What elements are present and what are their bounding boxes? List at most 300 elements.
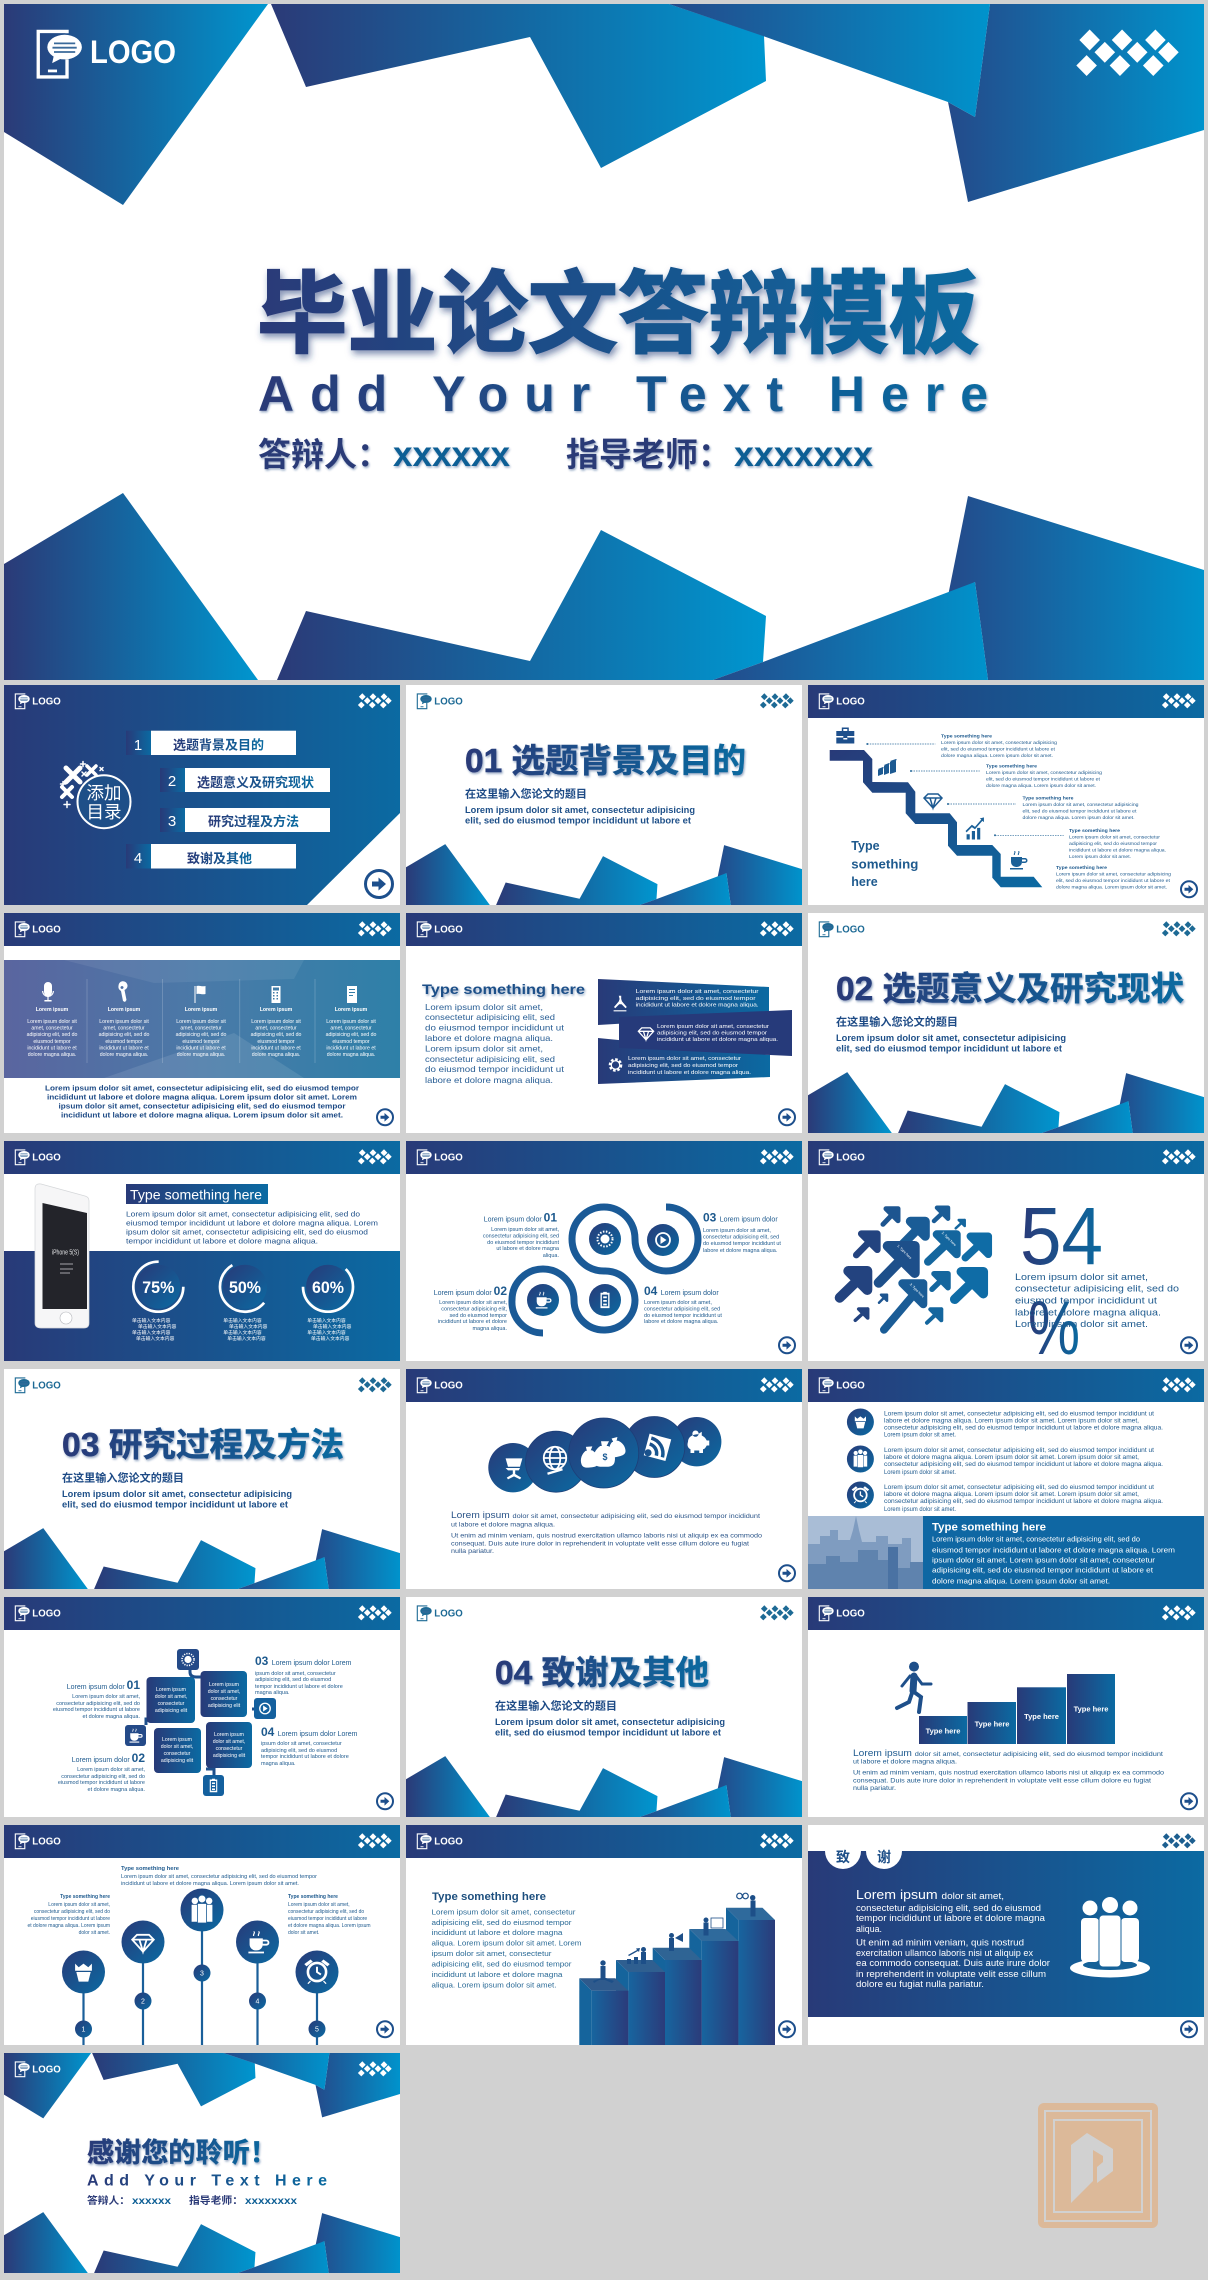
column 2 text: adipisicing elit, sed do <box>99 1032 149 1038</box>
lower colour band <box>4 1251 400 1361</box>
icon: diamonds <box>358 1377 392 1392</box>
panel: steps slide <box>808 1597 1204 1817</box>
text block 01: Lorem ipsum dolor 01 <box>484 1210 557 1224</box>
bottom geometric shapes <box>406 844 802 905</box>
text block 01: consectetur adipisicing elit, sed <box>483 1234 559 1240</box>
section title: 01 选题背景及目的 <box>465 742 746 779</box>
watermark stamp <box>1038 2103 1158 2228</box>
logo <box>417 1834 463 1849</box>
section subtitle: 在这里输入您论文的题目 <box>465 786 587 800</box>
icon: diamonds <box>760 1833 794 1848</box>
text list 1: labore et dolore magna aliqua. Lorem ipsum dolor sit amet. Lorem ipsum dolor sit amet, <box>884 1418 1139 1424</box>
closing presenter line: 指导老师： <box>189 2194 243 2207</box>
left text block: eiusmod tempor incididunt ut labore <box>31 1916 110 1922</box>
body text: aliqua. Lorem ipsum dolor sit amet. <box>432 1980 556 1989</box>
side heading <box>851 839 918 889</box>
text block 5 <box>1056 865 1171 890</box>
lollipop 4: 4 <box>256 1998 260 2006</box>
icon: diamond pattern <box>1076 30 1179 76</box>
column 3 text: Lorem ipsum <box>185 1007 218 1013</box>
text band: eiusmod tempor incididunt ut labore et dolore magna aliqua. Lorem <box>932 1546 1175 1554</box>
column 4 text <box>251 1007 301 1058</box>
tile 4: Lorem ipsum <box>214 1732 244 1738</box>
ribbon panel 1: adipisicing elit, sed do eiusmod tempor <box>636 996 756 1002</box>
node: battery <box>589 1284 621 1316</box>
logo: LOGO <box>32 2063 61 2075</box>
section body: elit, sed do eiusmod tempor incididunt ut labore et <box>465 816 691 826</box>
text block 02: consectetur adipisicing elit, <box>441 1306 507 1312</box>
logo <box>819 1606 865 1621</box>
text block 1: elit, sed do eiusmod tempor incididunt ut labore et <box>941 746 1056 752</box>
section body: elit, sed do eiusmod tempor incididunt ut labore et <box>836 1044 1062 1054</box>
icon: diamonds <box>1162 1833 1196 1848</box>
text list 3 <box>884 1485 1163 1513</box>
text block 04: consectetur adipisicing elit, sed <box>644 1306 720 1312</box>
text list 3: Lorem ipsum dolor sit amet, consectetur adipisicing elit, sed do eiusmod tempor incididunt ut <box>884 1485 1154 1491</box>
big number: 54 <box>1020 1191 1103 1282</box>
button: next <box>779 1109 795 1125</box>
text block 2: dolore magna aliqua. Lorem ipsum dolor sit amet. <box>986 783 1096 788</box>
icon: diamonds <box>760 1605 794 1620</box>
column 5 text <box>326 1007 376 1058</box>
text list 3: labore et dolore magna aliqua. Lorem ipsum dolor sit amet. Lorem ipsum dolor sit amet, <box>884 1492 1139 1498</box>
logo: LOGO <box>434 1379 463 1391</box>
body text <box>126 1209 378 1246</box>
body text: eiusmod tempor incididunt ut <box>1015 1295 1157 1305</box>
body text: dolore eu fugiat nulla pariatur. <box>856 1979 984 1989</box>
gauge caption 2: 单击输入文本内容 <box>223 1329 262 1336</box>
icon: chart <box>966 817 984 839</box>
column 3 text: Lorem ipsum dolor sit <box>176 1019 226 1025</box>
text list 1: consectetur adipisicing elit, sed do eiusmod tempor incididunt ut labore et dolore magna aliqua. <box>884 1426 1163 1432</box>
side heading: something <box>851 858 918 872</box>
column 3 text: adipisicing elit, sed do <box>176 1032 226 1038</box>
lollipop 3: 3 <box>200 1970 204 1978</box>
column 5 text: dolore magna aliqua. <box>327 1052 375 1058</box>
text list 2: consectetur adipisicing elit, sed do eiusmod tempor incididunt ut labore et dolore magna aliqua. <box>884 1462 1163 1468</box>
ribbon panel 3: Lorem ipsum dolor sit amet, consectetur <box>628 1056 741 1062</box>
lollipop stems <box>84 1910 317 2045</box>
icon: diamonds <box>760 693 794 708</box>
panel: ribbon slide <box>406 913 802 1133</box>
column 1 text: eiusmod tempor <box>33 1039 71 1045</box>
badge: 致: 致 <box>836 1849 850 1865</box>
column 1 text <box>27 1007 77 1058</box>
header bar <box>808 1369 1204 1402</box>
section body <box>62 1489 292 1510</box>
column 5 text: adipisicing elit, sed do <box>326 1032 376 1038</box>
column 3 text: eiusmod tempor <box>182 1039 220 1045</box>
body text: consequat. Duis aute irure dolor in reprehenderit in voluptate velit esse cillum dolore eu fugiat <box>853 1778 1151 1784</box>
step bar 2 <box>968 1702 1016 1744</box>
icon circle 1 <box>847 1408 874 1436</box>
contents item 3: 3 <box>168 813 176 830</box>
text block 03 <box>255 1654 352 1696</box>
column 5 text: Lorem ipsum dolor sit <box>326 1019 376 1025</box>
section body <box>836 1033 1066 1054</box>
header bar <box>808 1597 1204 1630</box>
s-curve ribbon <box>512 1207 698 1333</box>
column 1 text: Lorem ipsum <box>36 1007 69 1013</box>
footer text: ipsum dolor sit amet, consectetur adipisicing elit, sed do eiusmod tempor <box>58 1102 346 1110</box>
icon: diamonds <box>358 2061 392 2076</box>
logo <box>15 1834 61 1849</box>
logo <box>15 2062 61 2077</box>
top text block: incididunt ut labore et dolore magna aliqua. Lorem ipsum dolor sit amet. <box>121 1881 299 1887</box>
badge: add contents: 目录 <box>86 802 122 822</box>
step bar 3: Type here <box>1024 1712 1059 1721</box>
section body: Lorem ipsum dolor sit amet, consectetur adipisicing <box>836 1033 1066 1043</box>
button: next <box>1181 1793 1197 1809</box>
lollipop 2: 2 <box>141 1998 145 2006</box>
logo <box>417 694 463 709</box>
body text: Lorem ipsum dolor sit amet, <box>1015 1272 1148 1282</box>
circle: money bags: $ <box>602 1452 608 1462</box>
tile 1: adipisicing elit <box>155 1708 188 1714</box>
column 5 text: eiusmod tempor <box>332 1039 370 1045</box>
photo band <box>4 960 400 1078</box>
icon: diamonds <box>358 1149 392 1164</box>
icon: diamond <box>924 794 942 808</box>
tile 2: Lorem ipsum <box>209 1682 239 1688</box>
text block 01: Lorem ipsum dolor 01 <box>67 1678 140 1692</box>
icon: diamonds <box>1162 1605 1196 1620</box>
text block 3 <box>1022 796 1139 820</box>
icon: flag <box>194 986 206 1003</box>
column 5 text: incididunt ut labore et <box>326 1046 376 1052</box>
icon: diamonds <box>760 921 794 936</box>
logo <box>417 922 463 937</box>
tile 3: dolor sit amet, <box>161 1744 193 1750</box>
colour band <box>808 1851 1204 2017</box>
section body: Lorem ipsum dolor sit amet, consectetur adipisicing <box>62 1489 292 1499</box>
text block 04 <box>644 1284 722 1325</box>
text block 01: eiusmod tempor incididunt ut labore <box>53 1707 140 1713</box>
text block 03: consectetur adipisicing elit, sed <box>703 1234 779 1240</box>
gauge 60 percent <box>293 1251 363 1322</box>
gauge caption 3: 单击输入文本内容 <box>307 1317 346 1324</box>
icon: diamonds <box>760 1149 794 1164</box>
text block 01: aliqua. <box>543 1253 559 1259</box>
body text: Lorem ipsum dolor sit amet, consectetur adipisicing elit, sed do eiusmod tempor incididunt <box>451 1510 760 1520</box>
text block 4: incididunt ut labore et dolore magna aliqua. <box>1069 848 1166 852</box>
column 1 text: amet, consectetur <box>31 1026 73 1032</box>
lollipop 5 <box>296 1950 338 2038</box>
icon circle 2 <box>847 1446 874 1472</box>
panel: section 04 slide <box>406 1597 802 1817</box>
column 2 text: incididunt ut labore et <box>99 1046 149 1052</box>
gauge caption 2: 单击输入文本内容 <box>227 1335 266 1342</box>
contents item 4: 致谢及其他 <box>187 851 252 866</box>
section title: 02 选题意义及研究现状 <box>836 970 1184 1007</box>
icon tile: cup <box>125 1725 146 1746</box>
text block 3: dolore magna aliqua. Lorem ipsum dolor sit amet. <box>1022 815 1134 820</box>
side heading: Type <box>851 839 880 853</box>
percent sign: % <box>1028 1286 1080 1371</box>
body text: Lorem ipsum dolor sit amet, consectetur adipisicing elit, sed do <box>126 1209 360 1218</box>
icon: diamonds <box>1162 1149 1196 1164</box>
section body <box>465 805 695 826</box>
text block 3: elit, sed do eiusmod tempor incididunt ut labore et <box>1022 808 1137 814</box>
subtitle: Add Your Text Here <box>258 366 988 422</box>
icon: diamonds <box>760 1377 794 1392</box>
arrow labels: 2. Type here <box>941 1231 957 1247</box>
ribbon panel 2: adipisicing elit, sed do eiusmod tempor <box>657 1030 767 1036</box>
ribbon panel 1: incididunt ut labore et dolore magna aliqua. <box>636 1002 759 1008</box>
text block 2: Type something here <box>986 764 1037 768</box>
arrow cluster <box>840 1208 988 1330</box>
text block 1: Type something here <box>941 734 992 738</box>
logo: LOGO <box>434 695 463 707</box>
text block 04: magna aliqua. <box>261 1761 296 1767</box>
logo <box>819 1378 865 1393</box>
closing presenter line <box>87 2194 298 2207</box>
icon: calculator <box>272 986 280 1003</box>
body text <box>856 1888 1050 1989</box>
body text: aliqua. <box>856 1924 882 1934</box>
icon circle 3 <box>847 1482 874 1508</box>
text band <box>923 1516 1204 1589</box>
tile 4: consectetur <box>216 1746 243 1752</box>
header bar <box>4 1597 400 1630</box>
section subtitle: 在这里输入您论文的题目 <box>836 1014 958 1028</box>
logo <box>417 1150 463 1165</box>
contents item 2: 2 <box>168 773 176 790</box>
text block 4: Lorem ipsum dolor sit amet, consectetur <box>1069 834 1161 840</box>
gauge caption 3 <box>307 1317 352 1342</box>
step bar 4 <box>1067 1674 1115 1744</box>
body text: incididunt ut labore et dolore magna <box>432 1970 563 1979</box>
tile 2: dolor sit amet, <box>208 1689 240 1695</box>
text block 03: magna aliqua. <box>255 1690 290 1696</box>
logo: LOGO <box>32 1151 61 1163</box>
gauge caption 3: 单击输入文本内容 <box>313 1323 352 1330</box>
lollipop 5: 5 <box>315 2026 319 2034</box>
header bar <box>808 685 1204 718</box>
body text: ipsum dolor sit amet, consectetur adipisicing elit, sed do eiusmod <box>126 1228 368 1236</box>
text block 2 <box>986 764 1102 788</box>
bottom geometric shapes <box>808 1072 1204 1133</box>
body text: adipisicing elit, sed do eiusmod tempor <box>432 1960 572 1968</box>
body text: Ut enim ad minim veniam, quis nostrud exercitation ullamco laboris nisi ut aliquip ex ea commodo <box>853 1770 1164 1776</box>
text block 1 <box>941 734 1057 758</box>
body text: adipisicing elit, sed do eiusmod tempor <box>432 1918 572 1927</box>
title: 毕业论文答辩模板 <box>257 265 979 365</box>
logo <box>15 1150 61 1165</box>
footer text: incididunt ut labore et dolore magna aliqua. Lorem ipsum dolor sit amet. <box>61 1110 343 1120</box>
text band: adipisicing elit, sed do eiusmod tempor incididunt ut labore et <box>932 1566 1154 1574</box>
header bar <box>406 1825 802 1858</box>
left body text: labore et dolore magna aliqua. <box>425 1033 553 1043</box>
tile 3: Lorem ipsum <box>162 1737 192 1743</box>
button: next <box>1181 881 1197 897</box>
icon: diamonds <box>358 1605 392 1620</box>
icon tile: play <box>254 1698 276 1719</box>
logo: LOGO <box>434 1835 463 1847</box>
column 2 text: Lorem ipsum <box>108 1007 141 1013</box>
text block 02: eiusmod tempor incididunt ut labore <box>58 1780 145 1786</box>
text block 4 <box>1069 828 1166 859</box>
badge: 致 <box>825 1849 861 1869</box>
left text block: et dolore magna aliqua. Lorem ipsum <box>27 1923 110 1929</box>
logo: LOGO <box>434 923 463 935</box>
phone image <box>35 1184 89 1328</box>
text block 03: Lorem ipsum dolor sit amet, <box>703 1228 771 1234</box>
gauge caption 3: 单击输入文本内容 <box>307 1329 346 1336</box>
tile 4: adipisicing elit <box>213 1753 246 1759</box>
text block 01: consectetur adipisicing elit, sed do <box>56 1701 140 1707</box>
badge: 谢: 谢 <box>877 1849 891 1865</box>
panel: arrows and 54 percent slide <box>808 1141 1204 1371</box>
tile 3 <box>154 1728 201 1773</box>
logo text: LOGO <box>90 34 176 70</box>
presenter line: 指导老师： <box>566 436 731 473</box>
text block 01 <box>53 1678 140 1720</box>
panel: 3d bars slide <box>406 1825 802 2045</box>
logo <box>15 1378 61 1393</box>
circle: chair cart <box>488 1443 538 1492</box>
top geometric shapes <box>4 2053 400 2118</box>
icon: key <box>118 981 127 1002</box>
closing subtitle: Add Your Text Here <box>87 2172 327 2190</box>
circle: piggy bank <box>672 1417 721 1466</box>
logo <box>819 694 865 709</box>
section body: elit, sed do eiusmod tempor incididunt ut labore et <box>62 1500 288 1510</box>
right text block: dolor sit amet. <box>288 1930 319 1936</box>
logo <box>819 1150 865 1165</box>
tile 1: dolor sit amet, <box>155 1694 187 1700</box>
body text: labore et dolore magna aliqua. <box>1015 1307 1161 1317</box>
presenter line: 答辩人： <box>258 436 390 473</box>
footer text: incididunt ut labore et dolore magna aliqua. Lorem ipsum dolor sit amet. Lorem <box>47 1092 358 1102</box>
body text: consectetur adipisicing elit, sed do eiusmod <box>856 1903 1041 1913</box>
section body: Lorem ipsum dolor sit amet, consectetur adipisicing <box>495 1717 725 1727</box>
text block 04: Lorem ipsum dolor sit amet, <box>644 1300 712 1306</box>
right text block: et dolore magna aliqua. Lorem ipsum <box>288 1923 371 1929</box>
contents item 3 <box>160 808 330 832</box>
body text: nulla pariatur. <box>853 1785 896 1792</box>
contents item 1: 选题背景及目的 <box>173 738 264 752</box>
logo: LOGO <box>836 1151 865 1163</box>
header bar <box>808 1141 1204 1174</box>
heading: Type something here <box>432 1891 546 1903</box>
body text: in reprehenderit in voluptate velit esse cillum <box>856 1969 1046 1979</box>
panel: thank-you text slide <box>808 1825 1204 2045</box>
text list 2 <box>884 1448 1163 1476</box>
ribbon panel 1: Lorem ipsum dolor sit amet, consectetur <box>636 989 759 995</box>
logo: LOGO <box>434 1151 463 1163</box>
panel: five column photo slide <box>4 913 400 1133</box>
text block 02: Lorem ipsum dolor sit amet, <box>77 1767 145 1773</box>
section subtitle: 在这里输入您论文的题目 <box>62 1470 184 1484</box>
right text block <box>288 1894 371 1936</box>
phone image: iPhone 5(S) <box>52 1250 79 1256</box>
body text: Lorem ipsum dolor sit amet, consectetur <box>432 1908 576 1916</box>
body text: ut labore et dolore magna aliqua. <box>853 1758 957 1766</box>
text block 02: magna aliqua. <box>472 1326 507 1332</box>
body text: Lorem ipsum dolor sit amet, <box>856 1888 1004 1902</box>
lollipop 1 <box>62 1950 105 2038</box>
text block 03: adipisicing elit, sed do eiusmod <box>255 1677 331 1683</box>
body text <box>853 1748 1164 1792</box>
closing presenter line: xxxxxxxx <box>245 2196 298 2207</box>
badge: 谢 <box>866 1849 902 1869</box>
circle: rss <box>624 1416 685 1478</box>
text band: Type something here <box>932 1522 1046 1534</box>
gauge 50 percent <box>210 1251 280 1322</box>
header bar <box>406 1369 802 1402</box>
text block 04: do eiusmod tempor incididunt ut <box>644 1313 722 1319</box>
column 4 text: dolore magna aliqua. <box>252 1052 300 1058</box>
header bar <box>406 913 802 946</box>
closing title: 感谢您的聆听！ <box>87 2137 277 2168</box>
city photo <box>808 1516 923 1589</box>
left text block: Lorem ipsum dolor sit amet, <box>48 1902 110 1908</box>
button: next <box>779 1565 795 1581</box>
contents item 3: 研究过程及方法 <box>208 814 299 829</box>
column 3 text: incididunt ut labore et <box>176 1046 226 1052</box>
icon: diamonds <box>1162 693 1196 708</box>
gauge 75 percent <box>133 1262 183 1312</box>
body text: tempor incididunt ut labore et dolore magna aliqua. <box>126 1236 318 1246</box>
contents item 1 <box>126 731 296 755</box>
left body text: Lorem ipsum dolor sit amet, <box>425 1044 543 1054</box>
tile 1: consectetur <box>158 1701 185 1707</box>
ribbon panel 1 <box>598 979 769 1025</box>
step bar 3 <box>1017 1687 1066 1744</box>
text block 04 <box>261 1725 358 1767</box>
logo: LOGO <box>32 1835 61 1847</box>
step bar 4: Type here <box>1074 1704 1108 1714</box>
right text block: consectetur adipisicing elit, sed do <box>288 1909 364 1915</box>
body text: exercitation ullamco laboris nisi ut aliquip ex <box>856 1948 1034 1958</box>
presenter line <box>258 435 874 474</box>
lollipop 4 <box>236 1920 279 2010</box>
contents item 4 <box>126 844 296 868</box>
button: next <box>779 2021 795 2037</box>
circle: globe <box>526 1431 586 1492</box>
tile connectors <box>146 1669 260 1775</box>
left text block <box>27 1894 110 1936</box>
body text: Ut enim ad minim veniam, quis nostrud <box>856 1938 1024 1948</box>
3d bars <box>579 1908 775 2045</box>
gauge caption 2: 单击输入文本内容 <box>229 1323 268 1330</box>
icon: logo phone <box>38 31 82 77</box>
text block 1: Lorem ipsum dolor sit amet, consectetur adipisicing <box>941 740 1057 745</box>
panel: section 01 slide <box>406 685 802 905</box>
header bar <box>4 1141 400 1174</box>
body text <box>1015 1272 1179 1329</box>
text list 3: Lorem ipsum dolor sit amet. <box>884 1507 956 1513</box>
body text: nulla pariatur. <box>451 1548 494 1555</box>
badge: add contents: 添加 <box>86 783 122 803</box>
contents item 1: 1 <box>134 737 142 754</box>
text block 03: 03 Lorem ipsum dolor <box>703 1210 778 1224</box>
text list 1: Lorem ipsum dolor sit amet, consectetur adipisicing elit, sed do eiusmod tempor incididunt ut <box>884 1411 1154 1417</box>
left heading: Type something here <box>422 981 585 997</box>
text block 2: elit, sed do eiusmod tempor incididunt ut labore et <box>986 776 1101 782</box>
header bar <box>4 1825 400 1858</box>
text block 04: tempor incididunt ut labore et dolore <box>261 1754 349 1760</box>
closing presenter line: xxxxxx <box>132 2196 172 2207</box>
body text <box>432 1908 582 1989</box>
logo <box>417 1378 463 1393</box>
gauge caption 1: 单击输入文本内容 <box>132 1329 171 1336</box>
icon tile: battery <box>203 1775 224 1796</box>
column 4 text: Lorem ipsum dolor sit <box>251 1019 301 1025</box>
text block 01: ut labore et dolore magna <box>496 1246 560 1252</box>
panel: puzzle tiles slide <box>4 1597 400 1817</box>
